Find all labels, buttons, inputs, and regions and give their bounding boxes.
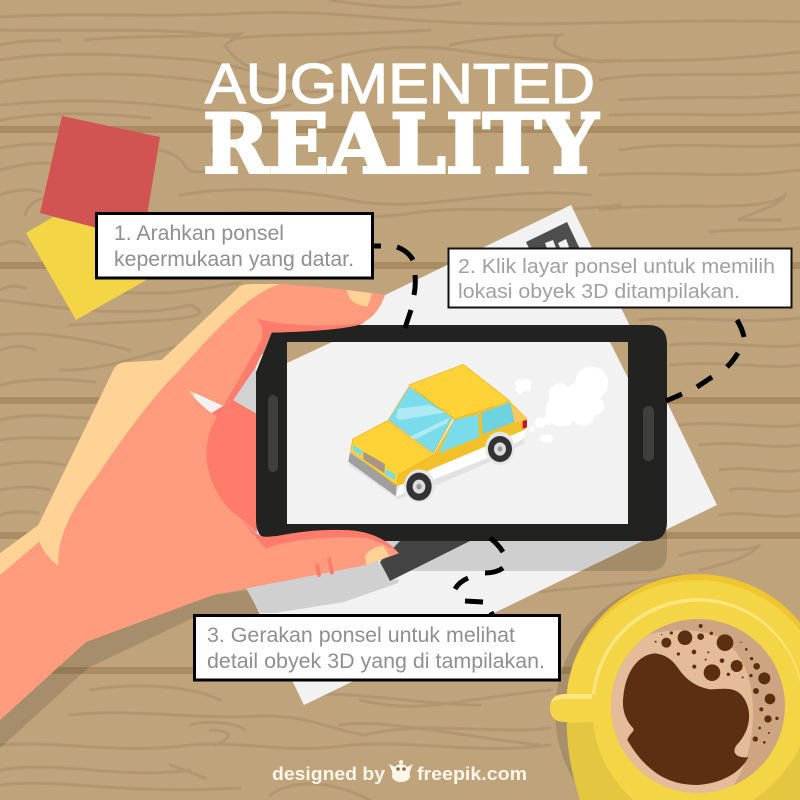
gray paper wedge near thumb	[241, 500, 257, 533]
icon: freepik logo	[389, 760, 413, 782]
callout 3: 3. Gerakan ponsel untuk melihat	[207, 624, 515, 647]
cup handle	[550, 694, 593, 722]
finger underside shadow	[223, 315, 373, 407]
dashed connector 2	[666, 320, 744, 401]
phone screen	[287, 342, 628, 524]
gray shadow beneath the thumb	[243, 556, 399, 613]
sticky note: red	[40, 116, 160, 240]
smartphone	[256, 325, 667, 541]
cup shadow	[555, 577, 800, 800]
coffee crema	[611, 630, 753, 793]
phone side pill left	[268, 395, 278, 472]
thumb creases	[317, 559, 332, 575]
title line: REALITY: REALITY	[203, 98, 599, 192]
callout 1: 1. Arahkan ponsel	[114, 222, 284, 245]
footer credit: freepik.com	[417, 764, 527, 784]
dark shadow band under phone	[380, 541, 470, 581]
footer credit: designed by	[272, 764, 385, 784]
inner palm shadow behind phone	[190, 400, 257, 533]
main hand skin	[0, 284, 399, 720]
title	[203, 52, 599, 192]
fingernail	[347, 290, 372, 307]
cup body	[565, 580, 800, 800]
phone shadow	[380, 530, 667, 571]
gray paper wedge near palm	[233, 366, 256, 414]
thumb top shadow	[242, 520, 399, 557]
coffee cup	[550, 574, 800, 800]
exhaust smoke	[515, 367, 608, 443]
callout 2	[448, 248, 792, 308]
callout 2: lokasi obyek 3D ditampilakan.	[458, 280, 740, 303]
marker paper sheet	[158, 205, 717, 705]
cup saucer rim	[566, 574, 800, 800]
dashed connector 1	[374, 246, 415, 328]
dark coffee surface	[623, 653, 749, 785]
callout 1	[96, 214, 372, 278]
shadow of the hand on the table	[0, 590, 262, 748]
callout 3: detail obyek 3D yang di tampilakan.	[207, 650, 545, 673]
cup highlight ring	[592, 598, 800, 695]
footer credit	[272, 760, 527, 784]
callout 1: kepermukaan yang datar.	[114, 248, 354, 271]
hand holding phone	[0, 284, 399, 720]
cup shaded lower right	[753, 747, 800, 800]
phone body	[256, 325, 667, 541]
AR marker on paper	[526, 222, 590, 290]
coffee	[600, 619, 785, 800]
phone side pill right	[643, 406, 654, 461]
light edge of hand	[0, 284, 283, 613]
cup shaded lower left	[567, 722, 633, 800]
isometric yellow car	[348, 364, 608, 503]
callout 3	[194, 616, 560, 680]
title line: AUGMENTED: AUGMENTED	[205, 52, 595, 115]
sticky note: yellow	[26, 217, 150, 320]
thumbnail	[365, 546, 389, 565]
dashed connector 3	[455, 538, 503, 618]
coffee bubbles	[655, 624, 779, 744]
callout 2: 2. Klik layar ponsel untuk memilih	[458, 255, 775, 278]
